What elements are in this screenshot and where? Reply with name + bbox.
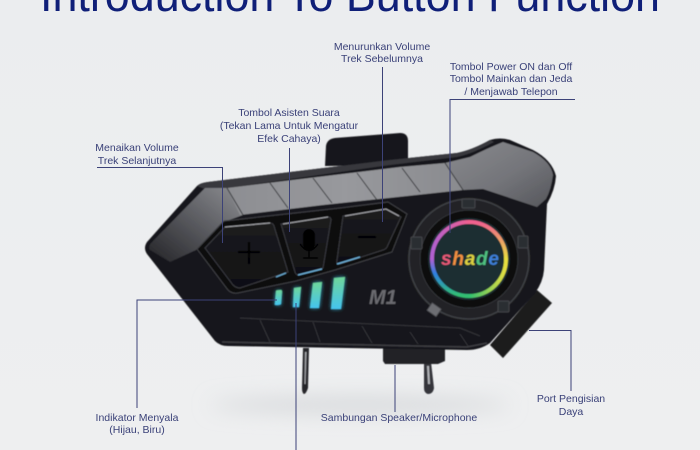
bottom highlight	[222, 342, 487, 347]
left bevel	[149, 188, 243, 262]
speaker pins	[302, 348, 434, 394]
label: volume up: Menaikan Volume	[95, 142, 179, 154]
M1 logo: M1	[369, 287, 397, 309]
label: volume down: Trek Sebelumnya	[341, 53, 423, 65]
device shadow	[210, 398, 510, 412]
grey strip panels	[227, 163, 463, 215]
label: volume up: Trek Selanjutnya	[98, 155, 176, 167]
label: voice assistant: Tombol Asisten Suara	[238, 107, 340, 119]
label: power: / Menjawab Telepon	[464, 86, 558, 98]
device: Bluetooth intercom	[145, 133, 556, 394]
charging port	[490, 290, 552, 358]
leader lines	[97, 67, 575, 450]
top strip right shoulder	[445, 142, 553, 207]
strip seams	[227, 163, 463, 215]
label: indicator: (Hijau, Biru)	[109, 424, 165, 436]
button blue underglow	[276, 257, 360, 277]
button: plus	[205, 223, 288, 288]
main body	[145, 138, 556, 350]
label: volume down: Menurunkan Volume	[334, 41, 430, 53]
speaker connector	[383, 346, 445, 364]
label: charging port: Daya	[559, 406, 583, 418]
LED indicators	[275, 277, 345, 309]
label: voice assistant: (Tekan Lama Untuk Mengatur	[220, 120, 359, 132]
label: speaker connector: Sambungan Speaker/Microphone	[321, 412, 477, 424]
rainbow ring	[432, 222, 506, 296]
dial	[407, 197, 531, 321]
bottom seam panels	[240, 318, 480, 346]
top rim	[197, 140, 494, 189]
dial tabs	[411, 199, 528, 317]
label: indicator: Indikator Menyala	[96, 412, 179, 424]
label: voice assistant: Efek Cahaya)	[257, 133, 321, 145]
mounting clip	[325, 133, 408, 166]
label: charging port: Port Pengisian	[537, 393, 605, 405]
button: minus	[337, 209, 401, 264]
label: power: Tombol Mainkan dan Jeda	[450, 73, 572, 85]
button: mic	[281, 217, 331, 275]
label: power: Tombol Power ON dan Off	[450, 61, 572, 73]
button cluster surround	[197, 202, 407, 293]
shade logo: shade	[441, 249, 499, 270]
